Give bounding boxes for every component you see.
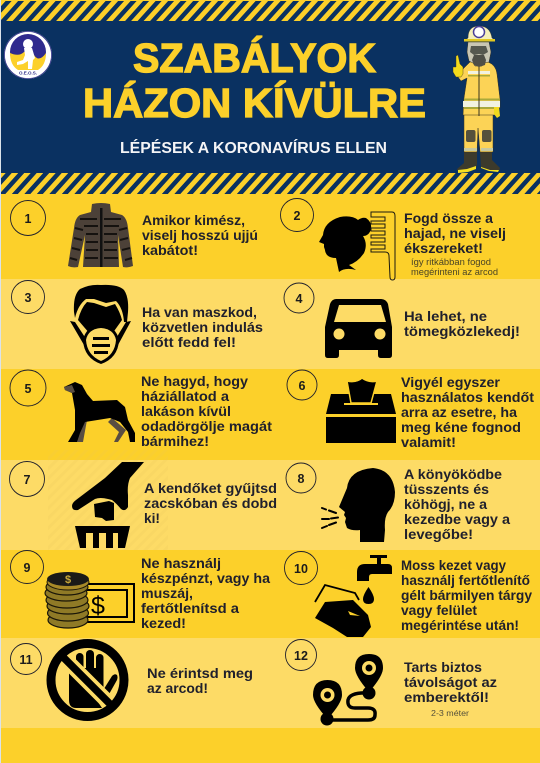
title: SZABÁLYOK <box>133 35 376 81</box>
text: step 6 <box>401 375 534 451</box>
text: step 2: Fogd össze a <box>404 211 493 227</box>
panel: step 2 <box>280 198 506 280</box>
number 12 <box>286 640 316 670</box>
text: step 3: közvetlen indulás <box>142 320 263 336</box>
panel: step 6 <box>287 370 534 451</box>
logo <box>4 31 52 79</box>
text: step 6: valamit! <box>401 435 456 451</box>
icon: washing hands <box>315 585 371 637</box>
text: step 1: kabátot! <box>142 243 198 259</box>
number 1: 1 <box>25 212 32 226</box>
text: step 9: Ne használj <box>141 556 221 572</box>
number 11: 11 <box>19 653 33 667</box>
title: HÁZON KÍVÜLRE <box>83 80 426 126</box>
text: step 3: előtt fedd fel! <box>142 335 236 351</box>
note: step 2: megérinteni az arcod <box>411 267 498 278</box>
number 3: 3 <box>25 291 32 305</box>
note: step 2: így ritkábban fogod <box>411 257 491 268</box>
icon: car <box>325 299 392 358</box>
text: step 9: muszáj, <box>141 586 193 602</box>
top hazard stripe <box>1 1 540 21</box>
text: step 8: A könyöködbe <box>404 467 502 483</box>
text: step 7: zacskóban és dobd <box>144 496 277 512</box>
text: step 10: használj fertőtlenítő <box>401 573 530 589</box>
header banner <box>1 1 540 194</box>
number 5: 5 <box>25 382 32 396</box>
text: step 5: háziállatod a <box>141 389 229 405</box>
text: step 8: levegőbe! <box>404 527 473 543</box>
icon: coin stack: $ <box>65 574 71 586</box>
note: step 12: 2-3 méter <box>431 709 469 718</box>
text: step 8 <box>404 467 510 543</box>
number 2 <box>280 198 314 232</box>
subtitle: LÉPÉSEK A KORONAVÍRUS ELLEN <box>120 140 387 157</box>
panel: step 12 <box>286 640 497 726</box>
number 4 <box>284 283 314 313</box>
icon: woman head <box>319 216 371 272</box>
text: step 3 <box>142 305 263 351</box>
text: step 10 <box>401 558 532 634</box>
icon: coin stack <box>45 572 89 628</box>
text: step 12: távolságot az <box>404 675 497 691</box>
icon: dog <box>64 382 135 442</box>
icon: banknote: $ <box>91 592 105 620</box>
text: step 1: viselj hosszú ujjú <box>142 228 258 244</box>
text: step 3: Ha van maszkod, <box>142 305 257 321</box>
text: step 10: gélt bármilyen tárgy <box>401 588 532 604</box>
text: step 5: bármihez! <box>141 434 209 450</box>
icon: faucet <box>357 555 392 581</box>
number 1 <box>10 200 46 236</box>
icon: person sneezing <box>339 468 395 542</box>
number 6 <box>287 370 317 400</box>
text: step 10: megérintése után! <box>401 618 519 634</box>
text: step 5: lakáson kívül <box>141 404 231 420</box>
number 11 <box>10 644 42 674</box>
text: step 6: meg kéne fognod <box>401 420 521 436</box>
icon: route pins <box>313 654 383 726</box>
text: step 10: Moss kezet vagy <box>401 558 506 574</box>
text: step 11 <box>147 666 253 697</box>
text: step 7: ki! <box>144 511 160 527</box>
panel: step 1 <box>10 200 258 267</box>
text: step 12: emberektől! <box>404 690 489 706</box>
icon: comb <box>371 212 395 280</box>
number 5 <box>10 370 46 406</box>
panel: step 11 <box>10 644 253 716</box>
text: step 7: A kendőket gyűjtsd <box>144 481 277 497</box>
icon: banknote <box>85 584 134 622</box>
number 7 <box>10 462 44 496</box>
note: step 2 <box>411 257 498 278</box>
bottom hazard stripe <box>1 173 540 194</box>
panel: step 10 <box>284 552 532 637</box>
panel: step 5 <box>10 370 272 450</box>
text: step 6: Vigyél egyszer <box>401 375 500 391</box>
number 4: 4 <box>296 292 303 306</box>
text: step 5: odadörgölje magát <box>141 419 272 435</box>
text: step 12 <box>404 660 497 706</box>
panel: step 7 <box>10 462 277 548</box>
panel: step 9 <box>10 550 270 632</box>
number 8 <box>286 463 316 493</box>
text: step 2: ékszereket! <box>404 241 483 257</box>
number 10 <box>284 552 318 584</box>
text: step 10: vagy felület <box>401 603 477 619</box>
text: step 4: Ha lehet, ne <box>404 309 487 325</box>
text: step 8: tüsszents és <box>404 482 489 498</box>
number 3 <box>12 280 44 314</box>
number 8: 8 <box>298 472 305 486</box>
text: step 2 <box>404 211 506 257</box>
text: step 4: tömegközlekedj! <box>404 324 520 340</box>
text: step 11: Ne érintsd meg <box>147 666 253 682</box>
icon: jacket <box>68 203 133 267</box>
text: step 8: köhögj, ne a <box>404 497 487 513</box>
panel: step 3 <box>12 280 263 364</box>
text: step 12: Tarts biztos <box>404 660 482 676</box>
text: step 6: arra az esetre, ha <box>401 405 517 421</box>
title <box>83 35 426 126</box>
number 7: 7 <box>24 473 31 487</box>
text: step 4 <box>404 309 520 340</box>
firefighter illustration <box>453 26 500 173</box>
text: step 5: Ne hagyd, hogy <box>141 374 248 390</box>
number 10: 10 <box>294 562 308 576</box>
icon: sneeze lines <box>322 508 338 528</box>
text: step 9: készpénzt, vagy ha <box>141 571 270 587</box>
text: step 8: kezedbe vagy a <box>404 512 510 528</box>
icon: face mask <box>70 285 131 364</box>
text: step 6: használatos kendőt <box>401 390 534 406</box>
text: step 7 <box>144 481 277 527</box>
text: step 9: fertőtlenítsd a <box>141 601 239 617</box>
number 6: 6 <box>299 379 306 393</box>
text: step 1: Amikor kimész, <box>142 213 245 229</box>
number 9 <box>10 550 44 584</box>
text: step 5 <box>141 374 272 450</box>
icon: no touching sign <box>51 644 124 716</box>
icon: hand dropping tissue in bin <box>72 462 144 548</box>
icon: water drop <box>363 587 374 604</box>
text: step 2: hajad, ne viselj <box>404 226 506 242</box>
number 9: 9 <box>24 561 31 575</box>
text: step 9 <box>141 556 270 632</box>
panel: step 4 <box>284 283 520 358</box>
number 2: 2 <box>294 209 301 223</box>
number 12: 12 <box>294 649 308 663</box>
icon: tissue box <box>326 378 396 443</box>
logo: O.E.O.S. <box>19 70 37 76</box>
text: step 11: az arcod! <box>147 681 208 697</box>
panel: step 8 <box>286 463 510 543</box>
text: step 9: kezed! <box>141 616 186 632</box>
text: step 1 <box>142 213 258 259</box>
